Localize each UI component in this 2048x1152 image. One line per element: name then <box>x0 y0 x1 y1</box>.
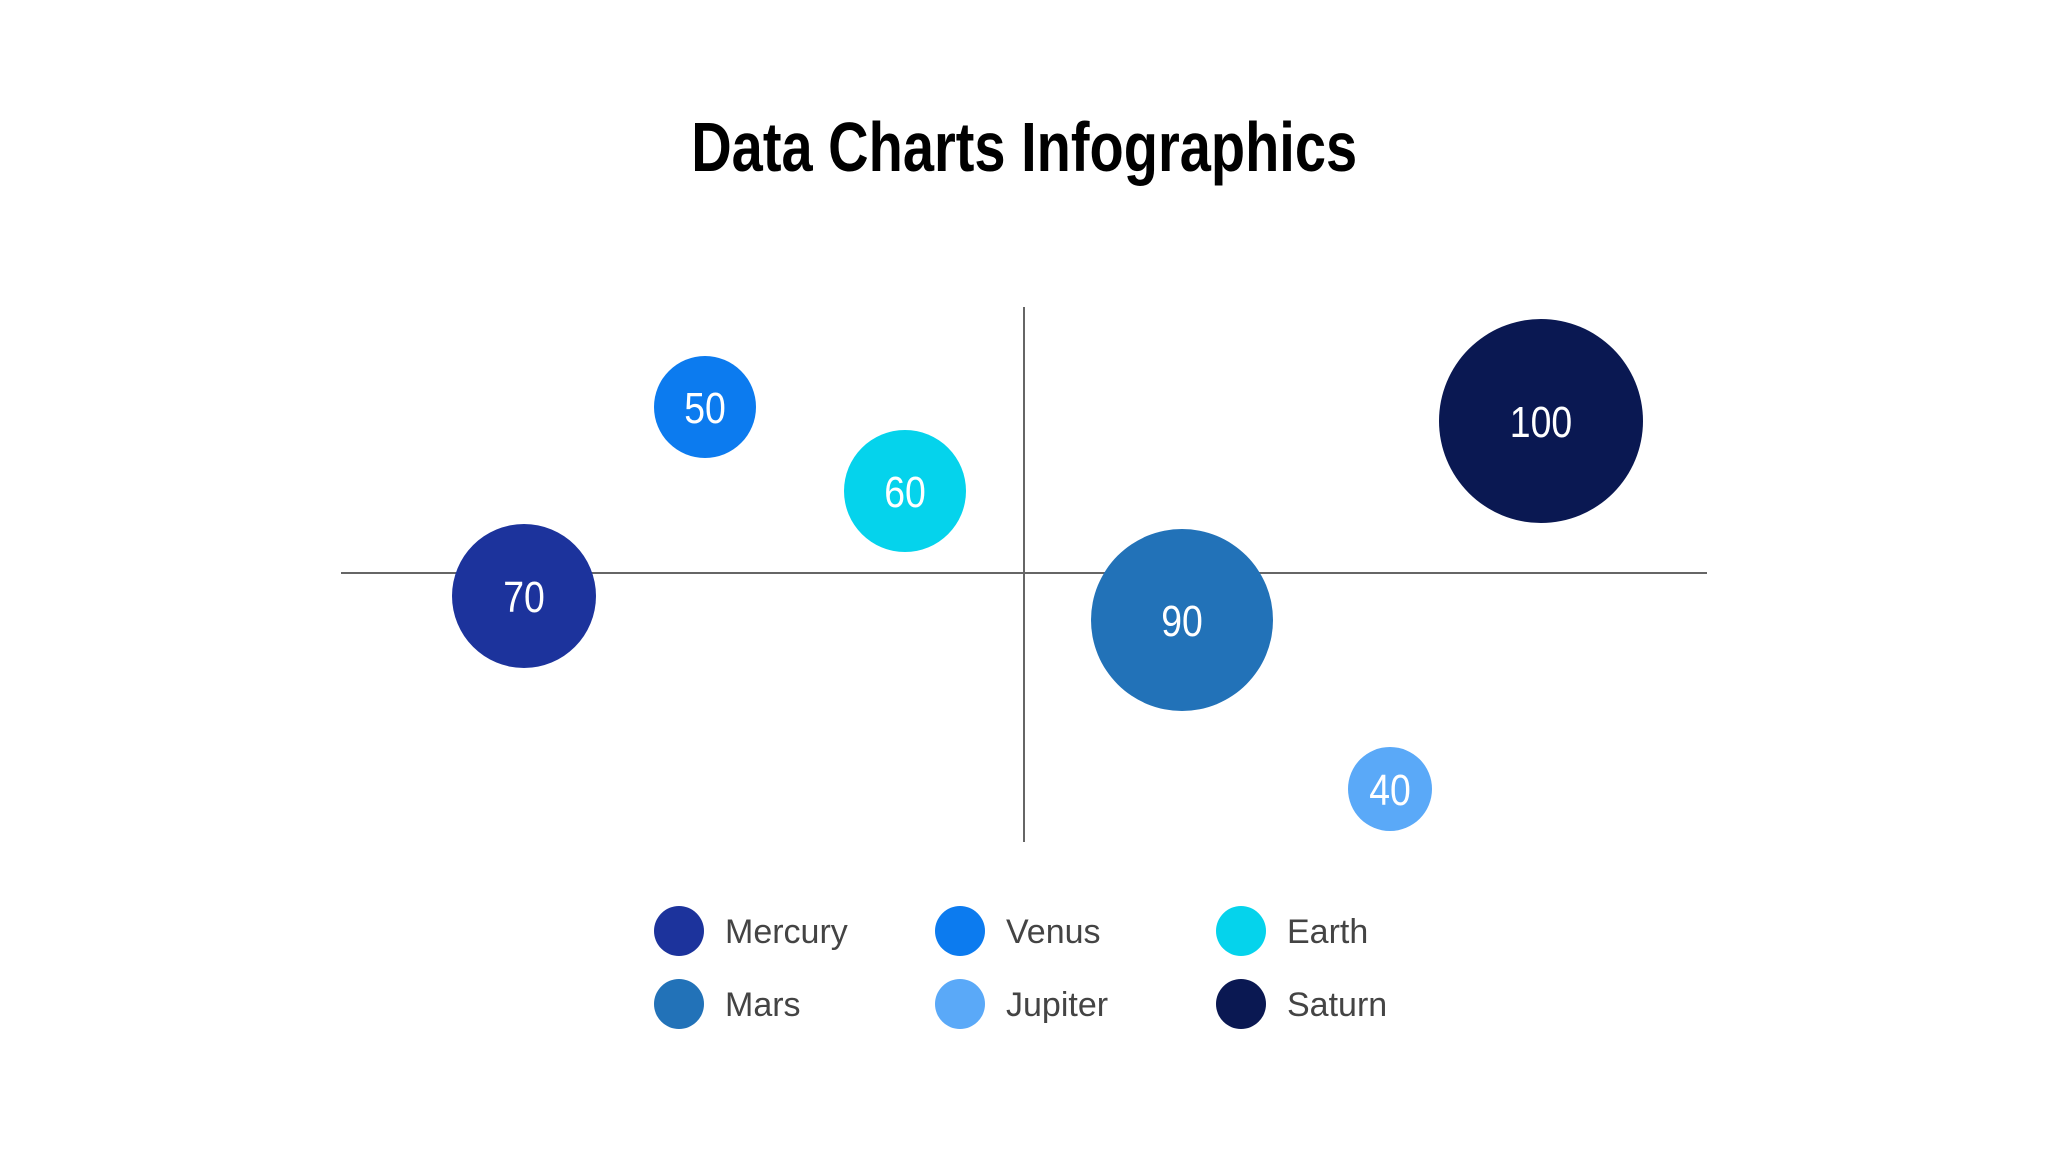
legend item: Venus <box>935 906 1101 956</box>
legend item: Mercury <box>654 906 848 956</box>
legend item: Venus: Venus <box>1006 913 1101 951</box>
legend item: Earth <box>1216 906 1368 956</box>
bubble: Saturn 100: 100 <box>1510 397 1572 447</box>
bubble: Earth 60: 60 <box>884 467 926 517</box>
bubble: Jupiter 40: 40 <box>1369 765 1411 815</box>
bubble: Earth 60 <box>844 430 966 552</box>
legend item: Earth: Earth <box>1287 913 1368 951</box>
bubble: Venus 50 <box>654 356 756 458</box>
bubble: Mars 90: 90 <box>1161 596 1203 646</box>
legend item: Jupiter <box>935 979 1108 1029</box>
legend item: Mars: Mars <box>725 986 801 1024</box>
bubble: Saturn 100 <box>1439 319 1643 523</box>
bubble: Venus 50: 50 <box>684 383 726 433</box>
legend item: Mercury: Mercury <box>725 913 848 951</box>
title: Data Charts Infographics <box>691 108 1357 186</box>
bubble: Jupiter 40 <box>1348 747 1432 831</box>
legend item: Mars <box>654 979 801 1029</box>
legend item: Saturn <box>1216 979 1387 1029</box>
bubble: Mercury 70: 70 <box>503 572 545 622</box>
legend item: Saturn: Saturn <box>1287 986 1387 1024</box>
bubble: Mars 90 <box>1091 529 1273 711</box>
legend item: Jupiter: Jupiter <box>1006 986 1108 1024</box>
bubble: Mercury 70 <box>452 524 596 668</box>
